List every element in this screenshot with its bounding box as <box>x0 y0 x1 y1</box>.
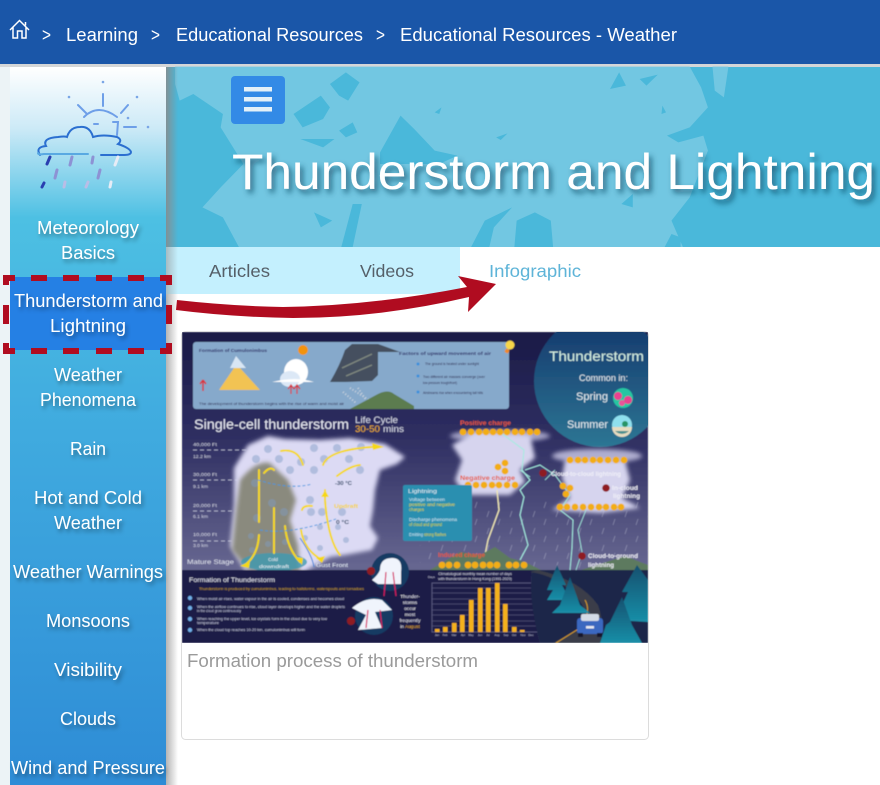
menu labels: Visibility <box>54 660 122 680</box>
caption: Formation process of thunderstorm <box>187 651 478 671</box>
menu button <box>231 76 285 124</box>
panel: formation of cumulonimbus <box>193 342 509 409</box>
panel: lightning: positive and negative <box>409 502 456 507</box>
bar chart: monthly thunderstorm days: May <box>468 633 474 637</box>
panel: formation of cumulonimbus: Airstreams rise when encountering tall hills <box>423 391 483 395</box>
charge and lightning labels: Induced charge <box>438 553 486 559</box>
card <box>182 315 666 740</box>
menu labels: Lightning <box>50 316 126 336</box>
panel: formation of thunderstorm: storms <box>403 600 418 606</box>
bar chart: monthly thunderstorm days: Aug <box>495 633 500 637</box>
storm cloud: mature stage: Updraft <box>334 504 358 510</box>
altitude scale: 12.2 km <box>193 454 211 460</box>
panel: formation of thunderstorm: occur <box>404 606 416 612</box>
menu labels: Clouds <box>60 709 116 729</box>
banner map land <box>175 67 728 247</box>
top breadcrumb bar <box>0 0 880 67</box>
top breadcrumb bar: > <box>151 24 160 45</box>
altitude scale: 10,000 Ft <box>193 532 218 538</box>
storm cloud: mature stage: Cold <box>268 557 278 563</box>
tabs: Videos <box>360 261 414 281</box>
active menu item <box>10 277 166 350</box>
altitude scale: 40,000 Ft <box>193 442 218 448</box>
panel: formation of cumulonimbus: Two different air masses converge (over <box>423 375 486 379</box>
panel: formation of cumulonimbus: The ground is heated under sunlight <box>425 362 479 366</box>
night road scene <box>530 565 648 643</box>
heading: single-cell thunderstorm <box>194 416 404 433</box>
panel: formation of thunderstorm: Thunder- <box>400 594 420 600</box>
page background strip <box>0 67 10 785</box>
menu labels: Weather <box>54 365 122 385</box>
charge and lightning labels: Cloud-to-cloud lightning <box>551 472 621 478</box>
panel: lightning: Emitting <box>409 532 424 537</box>
charge and lightning labels: Positive charge <box>460 421 512 427</box>
bar chart: monthly thunderstorm days: Days <box>428 575 435 579</box>
panel: formation of thunderstorm: Formation of Thunderstorm <box>189 578 275 584</box>
season circle: Spring <box>576 391 608 403</box>
storm cloud: mature stage: Mature Stage <box>187 559 234 566</box>
bar chart: monthly thunderstorm days: Sep <box>504 633 509 637</box>
altitude scale: 3.0 km <box>193 543 208 549</box>
bar chart: monthly thunderstorm days: Nov <box>521 633 526 637</box>
altitude scale: 30,000 Ft <box>193 472 218 478</box>
panel: formation of thunderstorm: When moist air rises, water vapour in the air is cooled, condenses and becomes cloud <box>197 597 344 601</box>
bar chart: monthly thunderstorm days: Jul <box>486 633 490 637</box>
updraft and downdraft arrows <box>245 447 372 565</box>
panel: formation of thunderstorm: Thunderstorm is produced by cumulonimbus, leading to hailstorms, waterspouts and tornadoes <box>199 587 364 591</box>
menu labels: Meteorology <box>37 218 139 238</box>
storm cloud: mature stage: downdraft <box>259 564 290 570</box>
menu labels: Thunderstorm and <box>14 291 163 311</box>
bar chart: monthly thunderstorm days: Climatological monthly mean number of days <box>438 572 512 576</box>
menu labels <box>11 218 165 778</box>
menu labels: Rain <box>70 439 106 459</box>
panel: formation of thunderstorm: in August <box>400 624 421 630</box>
tabs: Articles <box>209 261 270 281</box>
icon: cumulonimbus 1 <box>367 553 409 596</box>
bar chart: monthly thunderstorm days <box>428 572 538 637</box>
menu labels: Weather <box>54 513 122 533</box>
arrow <box>176 276 496 318</box>
sidebar <box>10 67 166 785</box>
panel: lightning: Discharge phenomena <box>409 517 458 522</box>
menu labels: Weather Warnings <box>13 562 163 582</box>
icon: cumulus <box>272 345 314 387</box>
season circle: Summer <box>567 419 608 431</box>
bar chart: monthly thunderstorm days: Jan <box>435 633 440 637</box>
top breadcrumb bar: Educational Resources <box>176 24 363 45</box>
icon: car <box>577 614 603 637</box>
panel: formation of cumulonimbus: The development of thunderstorm begins with the rise of warm and moist air <box>199 402 345 406</box>
infographic <box>182 315 666 643</box>
heading: single-cell thunderstorm: Life Cycle <box>355 415 398 426</box>
panel: lightning: charges <box>409 507 424 512</box>
charge and lightning labels: Cloud-to-ground <box>588 554 638 560</box>
icon: summer beach <box>612 415 632 437</box>
panel: formation of thunderstorm <box>182 553 540 643</box>
title: Thunderstorm and Lightning <box>232 144 875 200</box>
storm cloud: mature stage: Gust Front <box>316 563 349 569</box>
charge and lightning labels: lightning <box>588 563 614 569</box>
menu labels: Basics <box>61 243 115 263</box>
icon: home <box>10 20 29 38</box>
panel: formation of cumulonimbus: Formation of Cumulonimbus <box>199 348 267 353</box>
season circle <box>534 332 648 448</box>
icon: light bulb <box>504 340 514 354</box>
tabs: Infographic <box>489 261 581 281</box>
tabs <box>166 247 581 294</box>
panel: lightning: Voltage between <box>409 497 446 502</box>
hills <box>430 547 648 572</box>
altitude scale: 6.1 km <box>193 514 208 520</box>
bar chart: monthly thunderstorm days: with thunderstorm in Hong Kong (1991-2020) <box>438 577 512 581</box>
panel: formation of thunderstorm: most <box>405 612 416 618</box>
heading: single-cell thunderstorm: mins <box>383 424 404 435</box>
charge and lightning labels <box>438 421 640 569</box>
bar chart: monthly thunderstorm days: Oct <box>512 633 516 637</box>
heading: single-cell thunderstorm: Single-cell thunderstorm <box>194 417 349 432</box>
lightning clouds <box>430 421 648 572</box>
panel: formation of thunderstorm: in the cloud grow continuously <box>197 609 241 613</box>
icon: cumulonimbus 2 <box>347 597 393 635</box>
panel: formation of cumulonimbus: low-pressure trough/front) <box>423 381 457 385</box>
icon: sun, cloud and rain <box>38 81 149 187</box>
heading: single-cell thunderstorm: 30-50 <box>355 424 380 435</box>
bar chart: monthly thunderstorm days: Apr <box>461 633 465 637</box>
menu labels: Hot and Cold <box>34 488 142 508</box>
season circle: Thunderstorm <box>549 348 644 364</box>
icon: cumulonimbus <box>330 344 400 382</box>
charge and lightning labels: In-cloud <box>612 486 638 492</box>
panel: formation of thunderstorm: temperature <box>197 621 219 625</box>
altitude scale: 20,000 Ft <box>193 503 218 509</box>
callout: dashed red highlight <box>3 275 172 354</box>
storm cloud: mature stage: 0 °C <box>336 520 350 526</box>
top breadcrumb bar: > <box>376 24 385 45</box>
storm cloud: mature stage <box>187 436 405 574</box>
season circle: Common in: <box>579 373 628 384</box>
menu labels: Monsoons <box>46 611 130 631</box>
top breadcrumb bar: Educational Resources - Weather <box>400 24 677 45</box>
storm cloud: mature stage: -30 °C <box>335 481 352 487</box>
banner <box>166 67 880 247</box>
panel: lightning <box>403 485 472 541</box>
panel: formation of thunderstorm: When reaching the upper level, ice crystals form in the cloud due to very low <box>197 617 328 621</box>
panel: formation of cumulonimbus: Factors of upward movement of air <box>399 351 491 356</box>
panel: formation of thunderstorm: When the cloud top reaches 10-20 km, cumulonimbus will form <box>197 628 305 632</box>
bar chart: monthly thunderstorm days: Mar <box>452 633 456 637</box>
altitude scale <box>193 442 218 549</box>
charge markers <box>439 429 627 568</box>
bar chart: monthly thunderstorm days: Dec <box>529 633 534 637</box>
icon: spring flowers <box>613 388 633 408</box>
icon: mountain <box>219 368 260 390</box>
top breadcrumb bar: > <box>42 24 51 45</box>
altitude scale: 9.1 km <box>193 484 208 490</box>
rain streaks <box>428 502 639 568</box>
panel: formation of thunderstorm: When the airflow continues to rise, cloud layer develops higher and the water droplets <box>197 605 345 609</box>
charge and lightning labels: Negative charge <box>460 476 516 482</box>
panel: lightning: of cloud and ground <box>409 522 443 527</box>
bar chart: monthly thunderstorm days: Feb <box>443 633 448 637</box>
snowflakes and rain drops <box>248 443 365 553</box>
panel: formation of thunderstorm: frequently <box>399 618 421 624</box>
panel: lightning: Lightning <box>408 489 437 495</box>
sidebar shadow <box>166 294 178 785</box>
top breadcrumb bar: Learning <box>66 24 138 45</box>
menu labels: Phenomena <box>40 390 137 410</box>
panel: lightning: strong flashes <box>424 532 446 537</box>
side shadow over banner <box>166 67 178 247</box>
bar chart: monthly thunderstorm days: Jun <box>478 633 483 637</box>
menu labels: Wind and Pressure <box>11 758 165 778</box>
charge and lightning labels: lightning <box>613 494 640 500</box>
lightning bolts <box>483 433 586 570</box>
